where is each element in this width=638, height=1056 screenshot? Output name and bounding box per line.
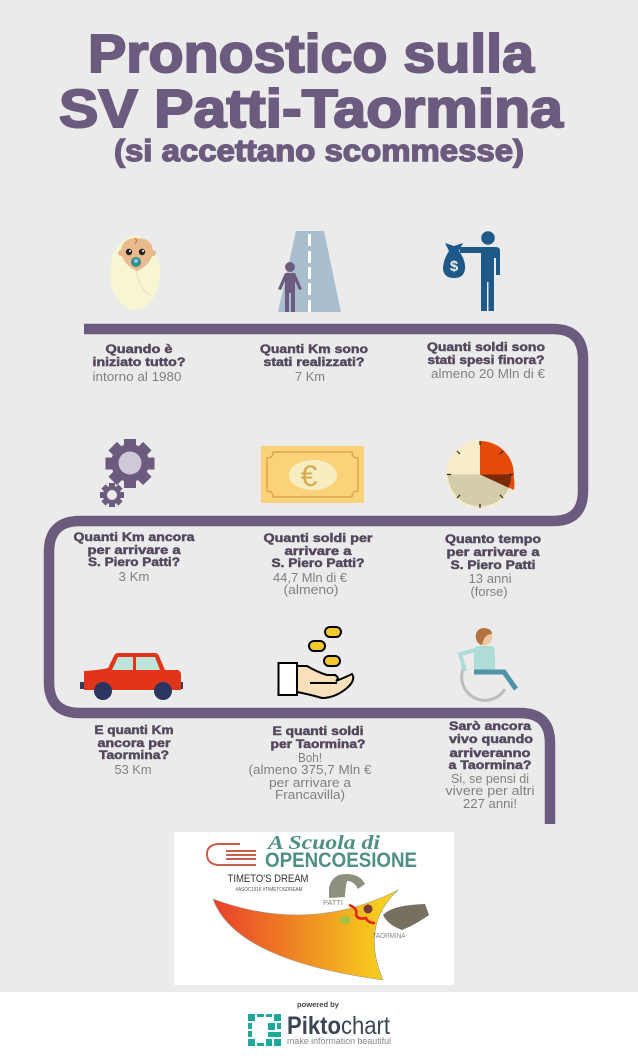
title: (si accettano scommesse): [114, 133, 524, 168]
question: money to Taormina: [248, 724, 372, 802]
question: money to San Piero Patti: 44,7 Mln di €: [273, 570, 348, 585]
question: money to San Piero Patti: (almeno): [284, 582, 338, 597]
icon: euro banknote: [261, 446, 364, 503]
question: when it started: intorno al 1980: [92, 369, 182, 384]
question: still alive: a Taormina?: [448, 758, 532, 772]
question: money to Taormina: Boh!: [298, 750, 322, 765]
question: time to San Piero Patti: [445, 532, 541, 599]
icon: road and person: [278, 231, 341, 312]
question: money to Taormina: E quanti soldi: [272, 724, 364, 738]
icon: person in wheelchair: [460, 628, 516, 700]
logo subtitle: #ASOC1516 #TIMETOSDREAM: [236, 887, 302, 893]
question: money to Taormina: Francavilla): [275, 787, 345, 802]
question: km built: stati realizzati?: [264, 355, 364, 369]
footer: Piktochart: [0, 992, 638, 1056]
question: when it started: Quando è: [106, 342, 173, 356]
question: km to San Piero Patti: per arrivare a: [88, 543, 181, 557]
question: money spent: [427, 340, 546, 381]
winding timeline path: [49, 329, 583, 824]
question: still alive: Sarò ancora: [449, 719, 531, 733]
logo heading: OPENCOESIONE: [265, 849, 417, 872]
question: time to San Piero Patti: per arrivare a: [446, 545, 540, 559]
question: money to Taormina: (almeno 375,7 Mln €: [248, 762, 372, 777]
question: km to Taormina: [94, 723, 174, 777]
question: km built: 7 Km: [295, 369, 325, 384]
logo book icon: [207, 844, 256, 865]
question: km to Taormina: E quanti Km: [94, 723, 174, 737]
question: money spent: almeno 20 Mln di €: [431, 366, 546, 381]
question: time to San Piero Patti: S. Piero Patti: [450, 558, 536, 572]
question: km to Taormina: 53 Km: [114, 762, 152, 777]
question: when it started: [92, 342, 186, 384]
icon: baby: [110, 236, 160, 310]
question: still alive: vivere per altri: [446, 783, 535, 798]
question: km to Taormina: Taormina?: [99, 748, 169, 762]
question: money to Taormina: per Taormina?: [270, 737, 366, 751]
Sicily sail map: [213, 890, 398, 980]
icon: clock pie: [446, 440, 514, 508]
icon: hand with coins: [278, 627, 353, 698]
question: still alive: 227 anni!: [463, 796, 517, 811]
logo heading: [265, 832, 417, 872]
question: money to San Piero Patti: arrivare a: [284, 544, 352, 558]
question: money spent: Quanti soldi sono: [427, 340, 545, 354]
question: when it started: iniziato tutto?: [92, 355, 186, 369]
logo subtitle: [228, 873, 308, 893]
question: km to Taormina: ancora per: [98, 736, 171, 750]
question: km to San Piero Patti: 3 Km: [118, 569, 150, 584]
icon: man holding money bag: $: [450, 258, 459, 275]
question: time to San Piero Patti: 13 anni: [468, 571, 512, 586]
logo heading: A Scuola di: [266, 832, 381, 854]
question: still alive: Si, se pensi di: [451, 771, 529, 786]
title: [59, 24, 564, 168]
question: time to San Piero Patti: (forse): [470, 584, 508, 599]
icon: red car: [80, 653, 183, 700]
Taormina theatre: [383, 904, 429, 930]
question: km built: Quanti Km sono: [260, 342, 368, 356]
question: still alive: vivo quando: [449, 732, 533, 746]
Piktochart tagline: make information beautiful: [287, 1036, 391, 1046]
powered by: powered by: [297, 1000, 340, 1009]
question: km to San Piero Patti: Quanti Km ancora: [74, 530, 195, 544]
title: SV Patti-Taormina: [59, 79, 564, 139]
question: km built: [260, 342, 368, 384]
question: time to San Piero Patti: Quanto tempo: [445, 532, 541, 546]
map labels: TAORMINA: [372, 931, 406, 940]
question: money to San Piero Patti: [264, 531, 373, 597]
icon: man holding money bag: [443, 231, 500, 311]
question: still alive: [446, 719, 535, 811]
question: money to San Piero Patti: Quanti soldi per: [264, 531, 373, 545]
question: money to Taormina: per arrivare a: [269, 775, 352, 790]
Piktochart wordmark: Piktochart: [287, 1012, 390, 1040]
question: money to San Piero Patti: S. Piero Patti?: [272, 556, 364, 570]
question: km to San Piero Patti: [74, 530, 195, 584]
Piktochart icon: [248, 1014, 281, 1046]
panel: A Scuola di OpenCoesione logo: [174, 832, 454, 985]
icon: euro banknote: €: [301, 460, 318, 493]
question: km to San Piero Patti: S. Piero Patti?: [88, 555, 180, 569]
title: Pronostico sulla: [88, 24, 535, 84]
logo subtitle: TIMETO'S DREAM: [228, 873, 308, 885]
map labels: [323, 898, 406, 940]
question: still alive: arriveranno: [450, 746, 530, 760]
map labels: PATTI: [323, 898, 343, 907]
Patti arch: [329, 874, 365, 898]
question: money spent: stati spesi finora?: [428, 353, 544, 367]
icon: gears: [100, 439, 154, 507]
